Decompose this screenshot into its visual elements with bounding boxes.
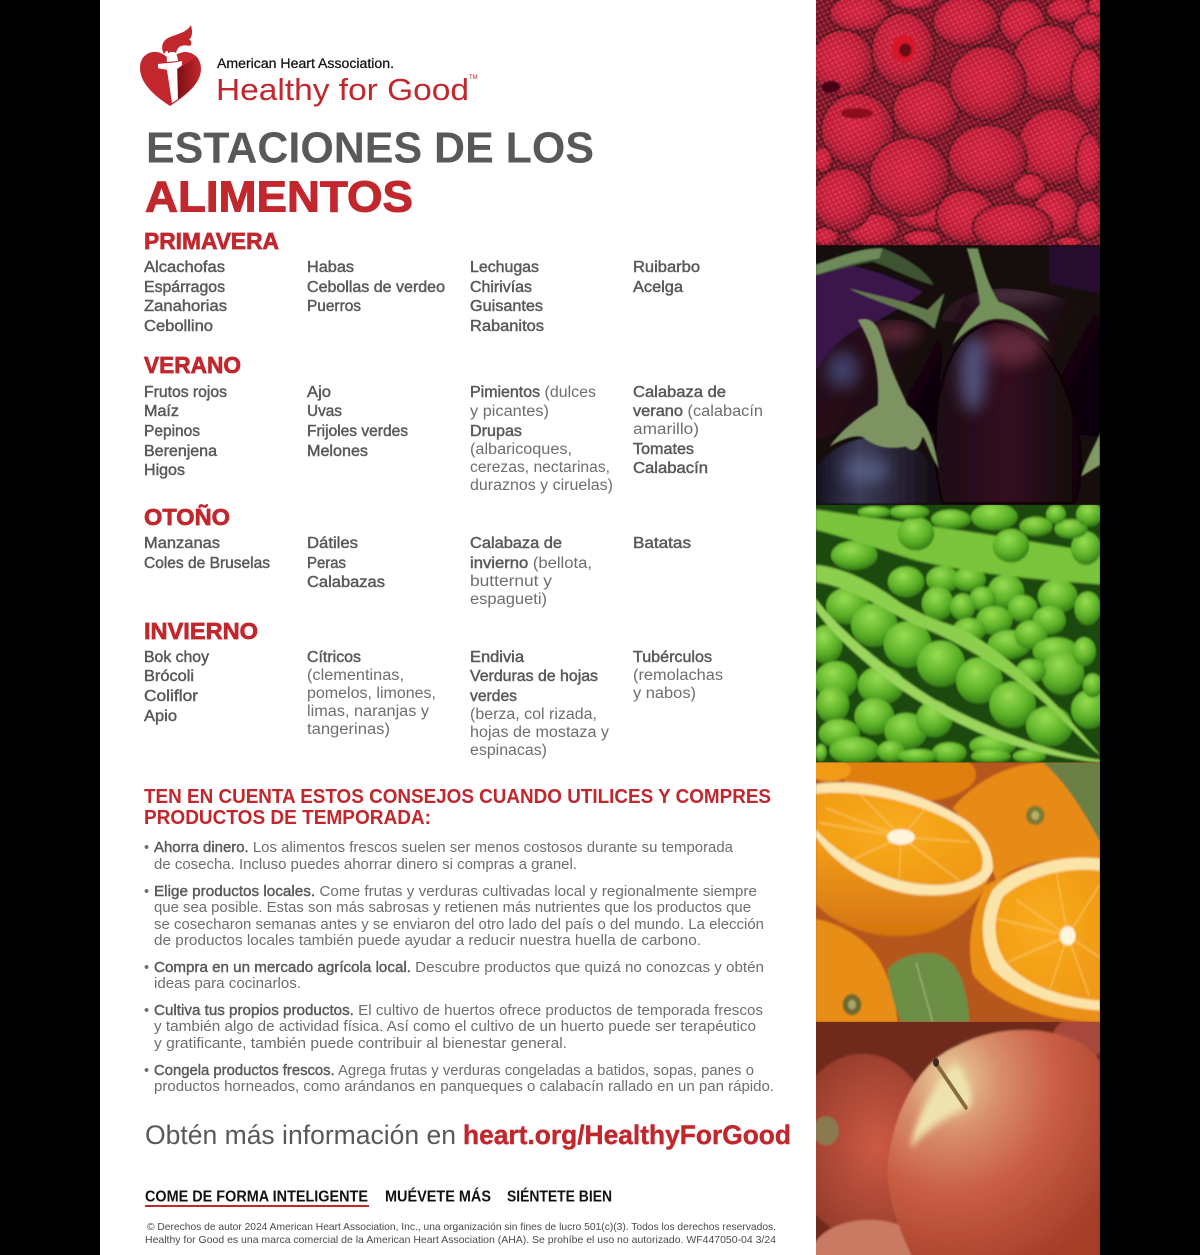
column 1: Higos: [144, 462, 185, 479]
pod: top: [816, 510, 1100, 584]
column 4: y nabos): [633, 685, 696, 702]
column 4: Calabacín: [633, 460, 708, 477]
tip: mercado agrícola: Compra en un mercado agrícola local. Descubre productos que quizá no conozcas y obtén: [154, 960, 764, 976]
tip: cultiva: •: [144, 1003, 149, 1019]
cta text: Obtén más información en: [145, 1120, 456, 1150]
heading: invierno: INVIERNO: [144, 618, 258, 644]
photo: oranges: [816, 762, 1100, 1022]
tip: mercado agrícola: •: [144, 960, 149, 976]
copyright: [145, 1221, 776, 1246]
nav underline: [145, 1205, 369, 1207]
trademark: TM: [469, 75, 478, 81]
tip: productos locales: se cosecharon semanas antes y se enviaron del otro lado del país o del mundo. La elección: [154, 917, 764, 933]
tip: congela: [144, 1063, 774, 1095]
column 1: Coles de Bruselas: [144, 555, 270, 572]
column 3: Lechugas: [470, 259, 539, 276]
peas: inside open pod: [851, 604, 1108, 747]
column 1: Cebollino: [144, 318, 213, 335]
column 3: Verduras de hojas: [470, 668, 598, 685]
column 1: Brócoli: [144, 668, 194, 685]
tip: productos locales: [144, 884, 764, 949]
column 4: [633, 384, 763, 477]
column 1: Zanahorias: [144, 298, 227, 315]
apple stem tip: [933, 1058, 939, 1067]
column 2: Dátiles: [307, 535, 358, 552]
column 2: Peras: [307, 555, 346, 572]
tips heading: TEN EN CUENTA ESTOS CONSEJOS CUANDO UTILICES Y COMPRES: [144, 785, 771, 808]
column 1: [144, 384, 227, 479]
tip: cultiva: Cultiva tus propios productos. El cultivo de huertos ofrece productos de temporada frescos: [154, 1003, 763, 1019]
cta link: heart.org/HealthyForGood: [463, 1120, 791, 1150]
column 3: (berza, col rizada,: [470, 706, 597, 723]
column 4: (remolachas: [633, 667, 723, 684]
panel: otoño: [144, 503, 691, 608]
tip: cultiva: [144, 1003, 763, 1052]
column 1: Espárragos: [144, 279, 225, 296]
panel: verano: [144, 352, 763, 494]
nav: come de forma inteligente: COME DE FORMA INTELIGENTE: [145, 1188, 368, 1206]
eggplant highlights: [827, 290, 1059, 483]
column 3: [470, 535, 592, 608]
panel: primavera: [144, 228, 700, 335]
nav: muévete más: MUÉVETE MÁS: [385, 1188, 491, 1206]
apple: left: [816, 1052, 915, 1228]
column 3: hojas de mostaza y: [470, 724, 609, 741]
footer navigation: [145, 1188, 612, 1207]
wordmark: American Heart Association: American Heart Association.: [217, 56, 394, 71]
column 4: Tubérculos: [633, 649, 712, 666]
apple: bottom left: [816, 1218, 912, 1255]
column 1: Coliflor: [144, 688, 198, 705]
tip: congela: productos horneados, como arándanos en panqueques o calabacín rallado en un pan rápido.: [154, 1079, 774, 1095]
photo: apples: [816, 1022, 1100, 1255]
column 3: (albaricoques,: [470, 441, 572, 458]
column 3: Endivia: [470, 649, 524, 666]
column 3: Chirivías: [470, 279, 532, 296]
panel: invierno: [144, 618, 723, 759]
peas: upper and back rows: [809, 541, 1101, 764]
tip: productos locales: Elige productos locales. Come frutas y verduras cultivadas local y regionalmente siempre: [154, 884, 757, 900]
column 2: limas, naranjas y: [307, 703, 429, 720]
title line 1: ESTACIONES DE LOS: [146, 124, 594, 172]
title line 2: ALIMENTOS: [145, 172, 413, 222]
column 3: cerezas, nectarinas,: [470, 459, 610, 476]
column 3: Pimientos (dulces: [470, 384, 596, 401]
column 3: Rabanitos: [470, 318, 544, 335]
column 2: pomelos, limones,: [307, 685, 436, 702]
column 3: Guisantes: [470, 298, 543, 315]
column 4: verano (calabacín: [633, 403, 763, 420]
column 3: espinacas): [470, 742, 547, 759]
copyright: Healthy for Good es una marca comercial de la American Heart Association (AHA). Se prohíbe el uso no autorizado. WF447050-04 3/24: [145, 1234, 776, 1246]
tip: ahorra dinero: [144, 840, 734, 873]
logo: American Heart Association Healthy for Good: [140, 25, 478, 107]
column 1: Alcachofas: [144, 259, 225, 276]
eggplant stems and caps: [829, 248, 1100, 477]
column 1: [144, 259, 227, 335]
apple stem: [935, 1062, 966, 1108]
heading: verano: VERANO: [144, 352, 241, 378]
nav: siéntete bien: SIÉNTETE BIEN: [507, 1188, 612, 1206]
tips heading: [144, 785, 771, 829]
column 1: Pepinos: [144, 423, 200, 440]
column 2: Calabazas: [307, 574, 385, 591]
pod: upper band: [816, 565, 1100, 755]
orange: lower left: [816, 919, 898, 1022]
title: [145, 124, 594, 222]
tip: mercado agrícola: ideas para cocinarlos.: [154, 976, 301, 992]
column 4: amarillo): [633, 421, 699, 438]
tip: ahorra dinero: de cosecha. Incluso puedes ahorrar dinero si compras a granel.: [154, 857, 577, 873]
peas: on top pod: [858, 502, 1103, 565]
column 3: [470, 384, 613, 494]
column 2: Habas: [307, 259, 354, 276]
icon: heart and torch: [140, 25, 201, 106]
photo: eggplants: [806, 233, 1110, 513]
tip: congela: •: [144, 1063, 149, 1079]
white content panel: [100, 0, 816, 1255]
apple: main: [887, 1030, 1100, 1255]
column 3: Calabaza de: [470, 535, 562, 552]
heading: otoño: OTOÑO: [144, 503, 230, 530]
tip: mercado agrícola: [144, 960, 764, 992]
orange half: right: [970, 856, 1100, 1022]
column 1: Bok choy: [144, 649, 209, 666]
column 2: Cebollas de verdeo: [307, 279, 445, 296]
column 3: butternut y: [470, 573, 552, 590]
column 1: [144, 649, 209, 725]
leaf: bottom: [888, 953, 969, 1022]
tip: productos locales: de productos locales también puede ayudar a reducir nuestra huella de carbono.: [154, 933, 701, 949]
column 3: y picantes): [470, 403, 549, 420]
column 1: Maíz: [144, 403, 179, 420]
column 2: [307, 535, 385, 591]
column 1: Manzanas: [144, 535, 220, 552]
tip: cultiva: y también algo de actividad física. Así como el cultivo de un huerto puede ser terapéutico: [154, 1019, 756, 1035]
heading: primavera: PRIMAVERA: [144, 228, 279, 254]
photo: raspberries: [816, 0, 1100, 246]
tip: congela: Congela productos frescos. Agrega frutas y verduras congeladas a batidos, sopas, panes o: [154, 1063, 754, 1079]
column 2: Cítricos: [307, 649, 361, 666]
column 2: (clementinas,: [307, 667, 404, 684]
tip: cultiva: y gratificante, también puede contribuir al bienestar general.: [154, 1036, 567, 1052]
column 3: [470, 649, 609, 759]
tip: productos locales: que sea posible. Estas son más sabrosas y retienen más nutrientes que los productos que: [154, 900, 751, 916]
column 1: Berenjena: [144, 443, 217, 460]
column 3: verdes: [470, 688, 517, 705]
column 4: Ruibarbo: [633, 259, 700, 276]
call to action: [145, 1120, 791, 1150]
column 1: [144, 535, 270, 572]
column 2: Melones: [307, 443, 368, 460]
column 4: [633, 259, 700, 296]
column 1: Frutos rojos: [144, 384, 227, 401]
column 4: Acelga: [633, 279, 683, 296]
leaf: top right: [1043, 762, 1100, 842]
tips list: [144, 840, 774, 1095]
copyright: © Derechos de autor 2024 American Heart Association, Inc., una organización sin fines de lucro 501(c)(3). Todos los derechos reservados.: [147, 1221, 776, 1233]
column 4: Tomates: [633, 441, 694, 458]
tip: productos locales: •: [144, 884, 149, 900]
column 2: [307, 384, 408, 460]
column 2: [307, 649, 436, 738]
orange: whole top right: [953, 762, 1100, 880]
column 2: Uvas: [307, 403, 342, 420]
tip: ahorra dinero: Ahorra dinero. Los alimentos frescos suelen ser menos costosos durante su temporada: [154, 840, 734, 856]
column 2: Puerros: [307, 298, 361, 315]
column 3: Drupas: [470, 423, 522, 440]
column 4: Calabaza de: [633, 384, 726, 401]
orange half: left: [816, 837, 991, 936]
tip: ahorra dinero: •: [144, 840, 149, 856]
photo: peas: [816, 504, 1100, 762]
column 3: invierno (bellota,: [470, 555, 592, 572]
column 2: Ajo: [307, 384, 331, 401]
column 4: Batatas: [633, 535, 691, 552]
pod: lower band: [816, 599, 1100, 762]
column 2: tangerinas): [307, 721, 390, 738]
column 4: [633, 649, 723, 702]
wordmark: Healthy for Good: Healthy for Good: [216, 72, 469, 107]
column 1: Apio: [144, 708, 177, 725]
tips heading: PRODUCTOS DE TEMPORADA:: [144, 806, 431, 829]
column 2: [307, 259, 445, 315]
column 3: espagueti): [470, 591, 547, 608]
column 3: [470, 259, 544, 335]
apple: cream hollow: [911, 1063, 971, 1148]
column 3: duraznos y ciruelas): [470, 477, 613, 494]
column 2: Frijoles verdes: [307, 423, 408, 440]
